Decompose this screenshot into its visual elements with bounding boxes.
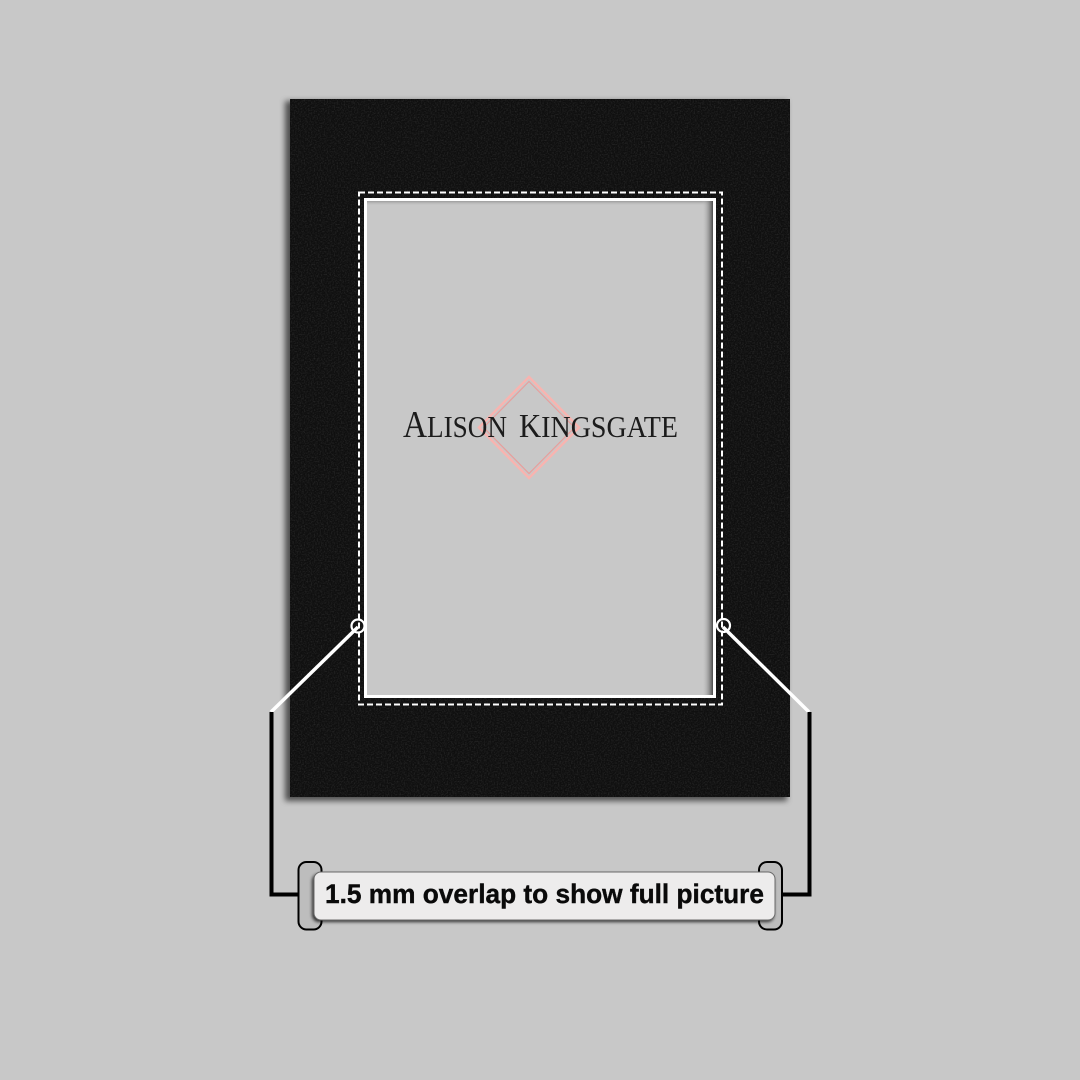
caption box [314,872,775,920]
logo: Alison Kingsgate [403,377,678,478]
left white leader [271,627,358,712]
icon: pink diamond [479,377,579,478]
mount drop shadow [285,101,787,801]
caption shadow [312,874,774,922]
right white leader [723,627,809,712]
label: overlap caption [298,862,782,930]
left bracket tab [298,862,322,930]
mount board [290,99,790,797]
left ring [352,620,364,632]
caption text: 1.5 mm overlap to show full picture [325,879,764,909]
window top shadow [367,201,713,206]
callout marker: right [717,619,810,894]
panel: black picture mount [285,99,790,801]
logo wordmark: Kingsgate: KINGSGATE [519,408,678,445]
window white bevel [366,200,714,696]
mount texture [290,99,790,797]
right black leader [782,712,810,894]
logo wordmark: Alison: ALISON [403,404,507,446]
callout marker: left [271,620,364,894]
dashed overlap line [359,192,722,704]
left black leader [272,712,298,894]
picture window [364,198,716,698]
window background [364,198,716,698]
window right shadow [702,201,713,695]
right ring [717,619,730,632]
right bracket tab [759,862,782,930]
